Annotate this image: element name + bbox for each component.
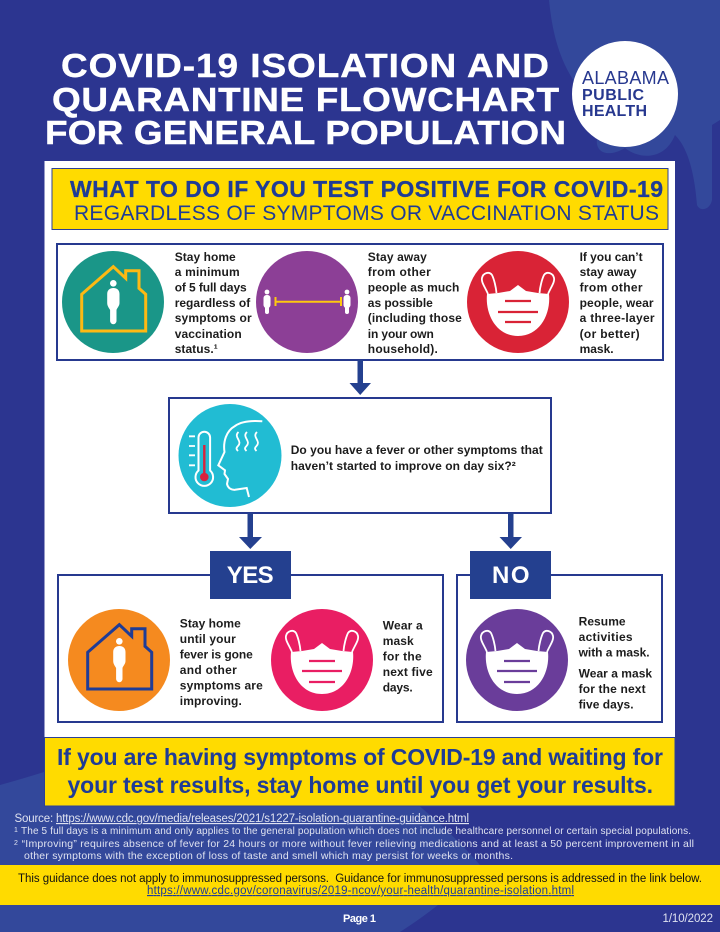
text: stay away: as possible	[368, 296, 433, 310]
callout: waiting for test results: If you are having symptoms of COVID-19 and waiting for	[57, 744, 663, 770]
title	[45, 48, 566, 152]
text: stay home until: until your	[180, 632, 236, 646]
text: resume activities: activities	[579, 630, 633, 644]
text: source and footnotes: other symptoms with the exception of loss of taste and smell which may persist for weeks or months.	[24, 850, 513, 862]
title: COVID-19 ISOLATION AND	[61, 48, 549, 85]
text: source and footnotes: 1	[14, 827, 18, 834]
label: no	[470, 551, 551, 599]
heading: what to do if you test positive: WHAT TO DO IF YOU TEST POSITIVE FOR COVID-19	[70, 176, 663, 202]
text: stay home: a minimum	[175, 265, 240, 279]
text: wear a mask next five days: for the	[383, 650, 422, 664]
text: resume activities	[578, 614, 652, 712]
text: stay away: people as much	[368, 280, 459, 294]
text: wear a mask if you cannot stay away: people, wear	[580, 296, 654, 310]
icon: red mask	[467, 251, 569, 353]
text: stay away: (including those	[368, 311, 462, 325]
text: wear a mask if you cannot stay away: If you can’t	[580, 250, 643, 264]
arrow: to no	[500, 513, 522, 549]
text: resume activities: Wear a mask	[579, 666, 652, 680]
text: wear a mask next five days: mask	[383, 634, 414, 648]
footer: date: 1/10/2022	[662, 913, 713, 925]
text: stay away: Stay away	[368, 250, 427, 264]
text: stay home until: and other	[180, 663, 237, 677]
text: stay home until: fever is gone	[180, 648, 253, 662]
text: resume activities: with a mask.	[578, 646, 650, 660]
text: source and footnotes: Source: https://www.cdc.gov/media/releases/2021/s1227-isolation-quarantine-guidance.html	[14, 813, 469, 825]
text: wear a mask if you cannot stay away: (or better)	[580, 327, 640, 341]
text: question	[291, 443, 543, 473]
panel: first steps	[57, 244, 663, 360]
text: resume activities: Resume	[579, 614, 626, 628]
banner: immunosuppressed guidance: This guidance does not apply to immunosuppressed persons. Guidance for immunosuppressed persons is addressed in the link below.	[18, 873, 702, 885]
arrow: down to question	[350, 360, 371, 395]
text: stay away: from other	[368, 265, 431, 279]
text: stay away	[368, 250, 462, 356]
panel: main white flowchart	[44, 161, 675, 737]
text: source and footnotes: “Improving” requires absence of fever for 24 hours or more without fever relieving medications and at least a 50 percent improvement in all	[22, 838, 694, 850]
text: stay home: status.¹	[175, 342, 218, 356]
footer: page number: Page 1	[343, 913, 376, 925]
text: wear a mask if you cannot stay away: from other	[580, 280, 643, 294]
text: stay home: regardless of	[175, 296, 251, 310]
text: wear a mask next five days: Wear a	[383, 618, 423, 632]
text: stay home	[175, 250, 252, 356]
banner: immunosuppressed guidance	[0, 865, 720, 905]
text: stay home: vaccination	[175, 327, 242, 341]
icon: orange house	[68, 609, 170, 711]
callout: waiting for test results: your test results, stay home until you get your results.	[68, 772, 653, 798]
icon: pink mask	[271, 609, 373, 711]
title: QUARANTINE FLOWCHART	[52, 82, 560, 119]
text: resume activities: five days.	[579, 698, 634, 712]
panel: symptoms question	[169, 398, 551, 513]
logo: Alabama Public Health: PUBLIC	[582, 87, 644, 104]
text: wear a mask next five days	[383, 618, 433, 694]
text: stay home: of 5 full days	[175, 280, 247, 294]
title: FOR GENERAL POPULATION	[45, 115, 566, 152]
text: stay home: Stay home	[175, 250, 236, 264]
text: stay home until: improving.	[180, 694, 242, 708]
text: wear a mask if you cannot stay away: stay away	[580, 265, 637, 279]
text: wear a mask if you cannot stay away	[580, 250, 655, 356]
logo: Alabama Public Health: ALABAMA	[582, 68, 669, 88]
text: question: haven’t started to improve on day six?²	[291, 459, 516, 473]
label: yes	[210, 551, 291, 599]
text: wear a mask if you cannot stay away: mask.	[580, 342, 614, 356]
icon: house with person	[62, 251, 164, 353]
text: wear a mask next five days: next five	[383, 665, 433, 679]
text: source and footnotes: 2	[14, 840, 18, 847]
banner: immunosuppressed guidance: https://www.cdc.gov/coronavirus/2019-ncov/your-health/quarantine-isolation.html	[147, 885, 574, 897]
text: wear a mask if you cannot stay away: a three-layer	[580, 311, 655, 325]
text: source and footnotes	[14, 813, 694, 862]
text: stay home until: Stay home	[180, 616, 241, 630]
text: stay away: household).	[368, 342, 438, 356]
icon: purple mask	[466, 609, 568, 711]
text: stay home until: symptoms are	[180, 678, 263, 692]
logo: Alabama Public Health: HEALTH	[582, 103, 647, 120]
text: stay home: symptoms or	[175, 311, 252, 325]
label: yes: YES	[227, 562, 274, 589]
arrow: to yes	[239, 513, 262, 549]
icon: social distancing	[256, 251, 358, 353]
text: stay home until	[180, 616, 263, 708]
text: stay away: in your own	[368, 327, 434, 341]
text: source and footnotes: The 5 full days is a minimum and only applies to the general population which does not include healthcare personnel or certain special populations.	[21, 826, 691, 837]
logo: Alabama Public Health	[572, 41, 678, 147]
panel: yes	[58, 551, 443, 722]
callout: waiting for test results	[44, 738, 675, 806]
heading: what to do if you test positive: REGARDLESS OF SYMPTOMS OR VACCINATION STATUS	[74, 202, 659, 225]
heading: what to do if you test positive	[52, 168, 668, 230]
text: wear a mask next five days: days.	[383, 680, 413, 694]
text: question: Do you have a fever or other symptoms that	[291, 443, 543, 457]
icon: thermometer and head	[178, 404, 282, 507]
text: resume activities: for the next	[579, 682, 646, 696]
panel: no	[457, 551, 662, 722]
label: no: NO	[492, 562, 530, 589]
